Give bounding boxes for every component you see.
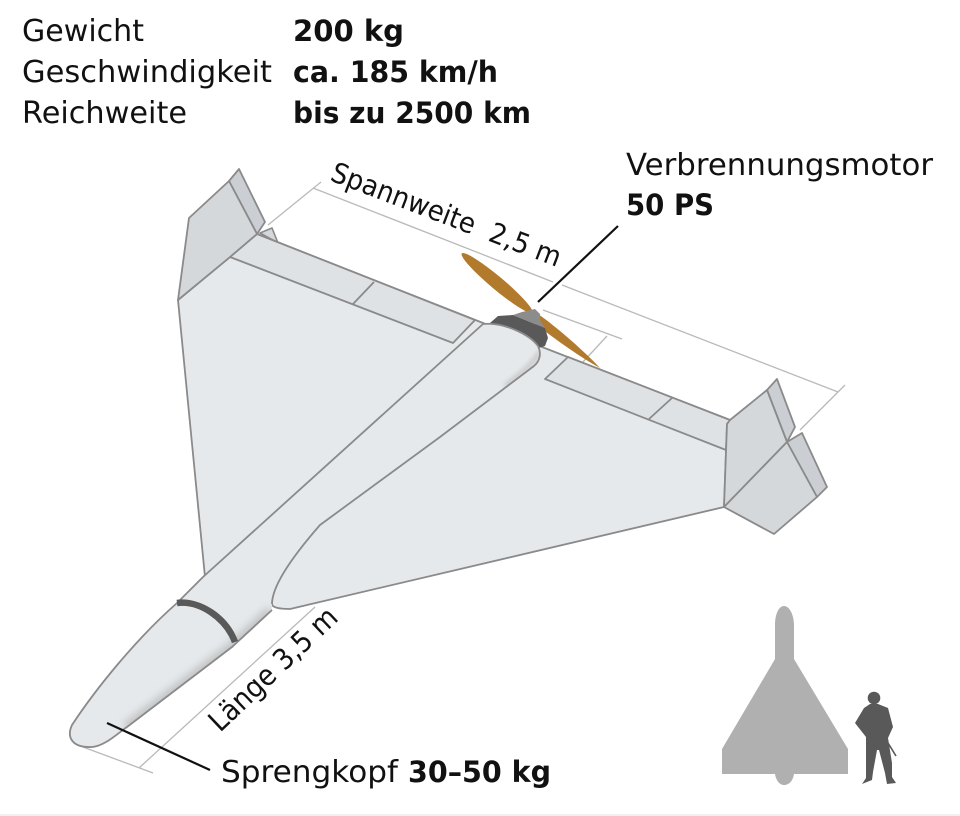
label: Reichweite: Reichweite <box>22 96 187 131</box>
value: weight: 200 kg <box>293 14 404 48</box>
engine leader line <box>538 226 618 302</box>
warhead ring <box>177 603 235 642</box>
fuselage shading <box>127 352 540 729</box>
label: wingspan: Spannweite 2,5 m <box>327 156 566 274</box>
right flap <box>545 357 730 450</box>
soldier silhouette <box>855 692 896 784</box>
value: range: bis zu 2500 km <box>293 96 531 130</box>
propeller front blade <box>458 248 536 318</box>
warhead label: Sprengkopf <box>221 755 399 790</box>
engine power: 50 PS <box>626 188 714 222</box>
small rear fin tab <box>260 228 278 243</box>
size comparison <box>722 606 896 785</box>
warhead weight: 30–50 kg <box>408 755 551 789</box>
callout: warhead <box>107 723 551 790</box>
propeller hub <box>513 309 545 328</box>
left fin <box>178 169 265 300</box>
engine label: Verbrennungsmotor <box>626 148 934 183</box>
propeller rear blade <box>533 314 600 368</box>
warhead leader line <box>107 723 210 770</box>
callout: engine <box>538 148 934 302</box>
dimension lines <box>83 182 845 773</box>
value: speed: ca. 185 km/h <box>293 55 498 89</box>
right fin lower <box>724 433 827 534</box>
bottom rule <box>0 814 960 816</box>
motor housing <box>490 315 548 348</box>
left flap <box>230 234 475 343</box>
label: Gewicht: Gewicht <box>22 14 144 49</box>
fuselage <box>70 324 540 747</box>
main wing <box>178 234 730 647</box>
specs table <box>22 14 531 131</box>
label: length: Länge 3,5 m <box>201 600 345 738</box>
drone silhouette <box>722 606 848 785</box>
label: Geschwindigkeit: Geschwindigkeit <box>22 55 272 90</box>
drone <box>70 169 827 747</box>
right fin upper <box>724 379 795 507</box>
